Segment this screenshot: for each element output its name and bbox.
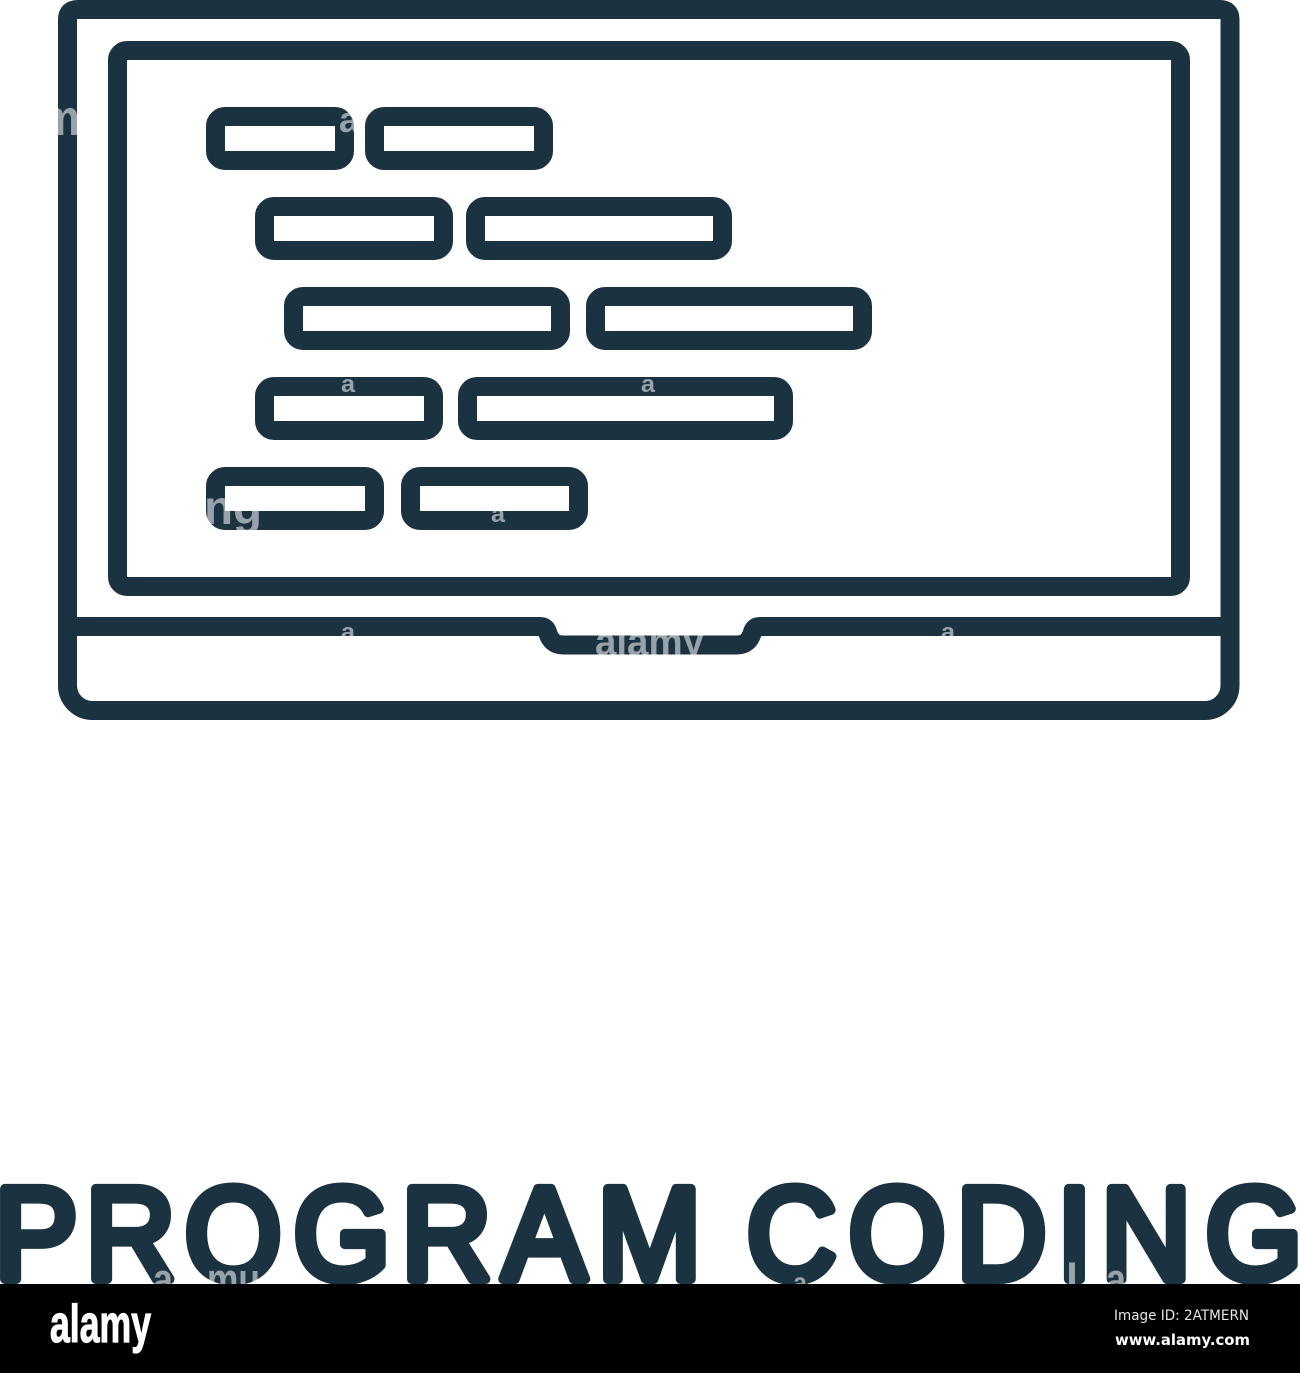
footer bar xyxy=(0,1284,1300,1373)
watermark fragments: a xyxy=(641,371,656,398)
watermark fragments: ng xyxy=(204,482,262,535)
watermark fragments: a xyxy=(341,371,356,398)
code row 5 xyxy=(216,476,578,520)
watermark fragments: a xyxy=(941,619,956,646)
watermark fragments: mu xyxy=(207,1255,260,1304)
laptop outer body xyxy=(68,10,1230,710)
laptop hinge with notch xyxy=(68,626,1230,645)
icon: laptop with code xyxy=(68,10,1230,710)
laptop screen xyxy=(118,50,1180,586)
watermark fragments: a xyxy=(341,619,356,646)
title: PROGRAM CODING xyxy=(0,1161,1300,1308)
watermark fragments: a xyxy=(153,1255,173,1304)
watermark fragments: a xyxy=(491,501,506,528)
code row 1 xyxy=(216,116,544,160)
watermark fragments: l xyxy=(1066,1254,1078,1306)
watermark fragments: alamy xyxy=(595,620,705,664)
watermark fragments: m xyxy=(40,90,80,146)
watermark fragments: a xyxy=(793,1267,807,1298)
code row 4 xyxy=(264,386,784,430)
watermark fragments: a xyxy=(1106,1255,1126,1304)
website: www.alamy.com xyxy=(1115,1331,1250,1349)
image id: Image ID: 2ATMERN xyxy=(1114,1308,1249,1324)
watermark fragments xyxy=(40,90,1126,1306)
watermark fragments: a xyxy=(339,99,360,140)
code row 2 xyxy=(264,206,722,250)
logo: alamy: alamy xyxy=(50,1295,151,1354)
code row 3 xyxy=(294,296,862,340)
